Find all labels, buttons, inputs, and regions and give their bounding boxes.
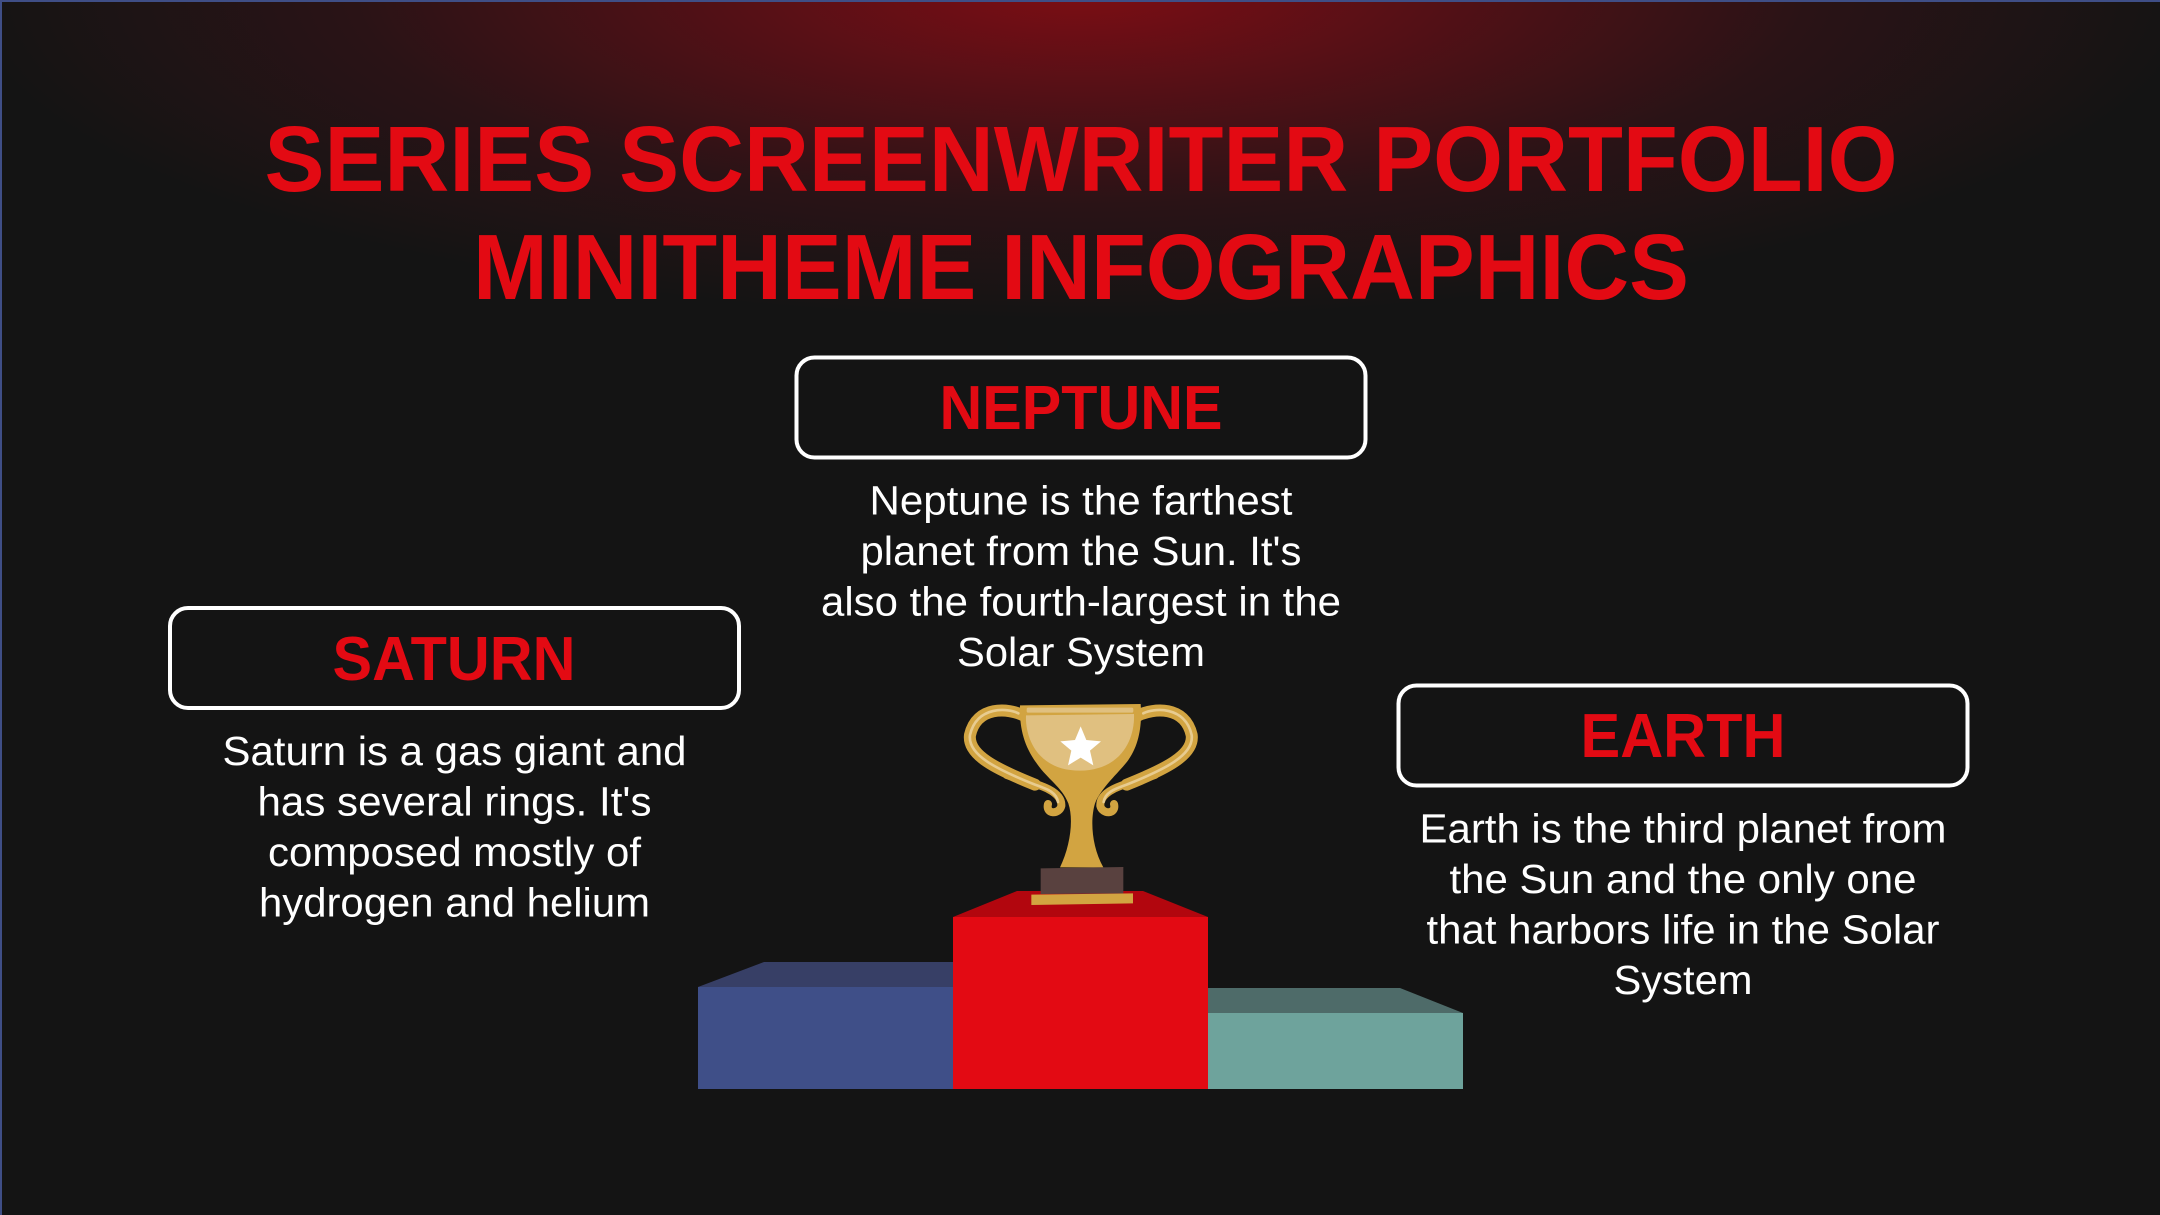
neptune description: Neptune is the farthest — [870, 478, 1293, 524]
podium: second place blue — [698, 962, 953, 1089]
earth heading — [1398, 686, 1968, 786]
neptune description: also the fourth-largest in the — [821, 578, 1341, 624]
earth description: that harbors life in the Solar — [1426, 906, 1940, 952]
earth heading: EARTH — [1580, 702, 1786, 771]
trophy rim highlight — [1027, 708, 1133, 713]
title: MINITHEME INFOGRAPHICS — [473, 215, 1689, 319]
neptune description: Solar System — [957, 629, 1205, 675]
icon: gold trophy — [970, 704, 1192, 905]
trophy cup highlight — [1026, 714, 1134, 771]
neptune description — [821, 478, 1341, 675]
podium: third place teal — [1208, 988, 1463, 1089]
saturn description: Saturn is a gas giant and — [222, 728, 686, 774]
earth description: Earth is the third planet from — [1420, 806, 1946, 852]
saturn description: has several rings. It's — [258, 778, 652, 824]
title — [264, 107, 1898, 319]
neptune description: planet from the Sun. It's — [860, 528, 1302, 574]
panel: earth — [1398, 686, 1968, 1003]
saturn description: hydrogen and helium — [259, 880, 650, 926]
icon: star — [1060, 726, 1101, 765]
title: SERIES SCREENWRITER PORTFOLIO — [264, 107, 1898, 211]
saturn description — [222, 728, 686, 926]
podium: first place red — [953, 891, 1208, 1089]
earth description: the Sun and the only one — [1450, 856, 1916, 902]
saturn heading: SATURN — [332, 625, 576, 694]
trophy right handle — [1100, 710, 1192, 812]
earth description — [1420, 806, 1946, 1003]
saturn heading — [170, 608, 739, 708]
podium — [698, 891, 1463, 1089]
neptune heading — [796, 358, 1366, 458]
trophy plate — [1031, 893, 1133, 905]
panel: saturn — [170, 608, 739, 926]
panel: neptune — [796, 358, 1366, 675]
trophy base — [1041, 867, 1123, 894]
trophy left handle — [970, 710, 1061, 812]
neptune heading: NEPTUNE — [940, 374, 1222, 443]
earth description: System — [1614, 957, 1752, 1003]
saturn description: composed mostly of — [268, 829, 642, 875]
trophy cup and stem — [1020, 704, 1141, 867]
